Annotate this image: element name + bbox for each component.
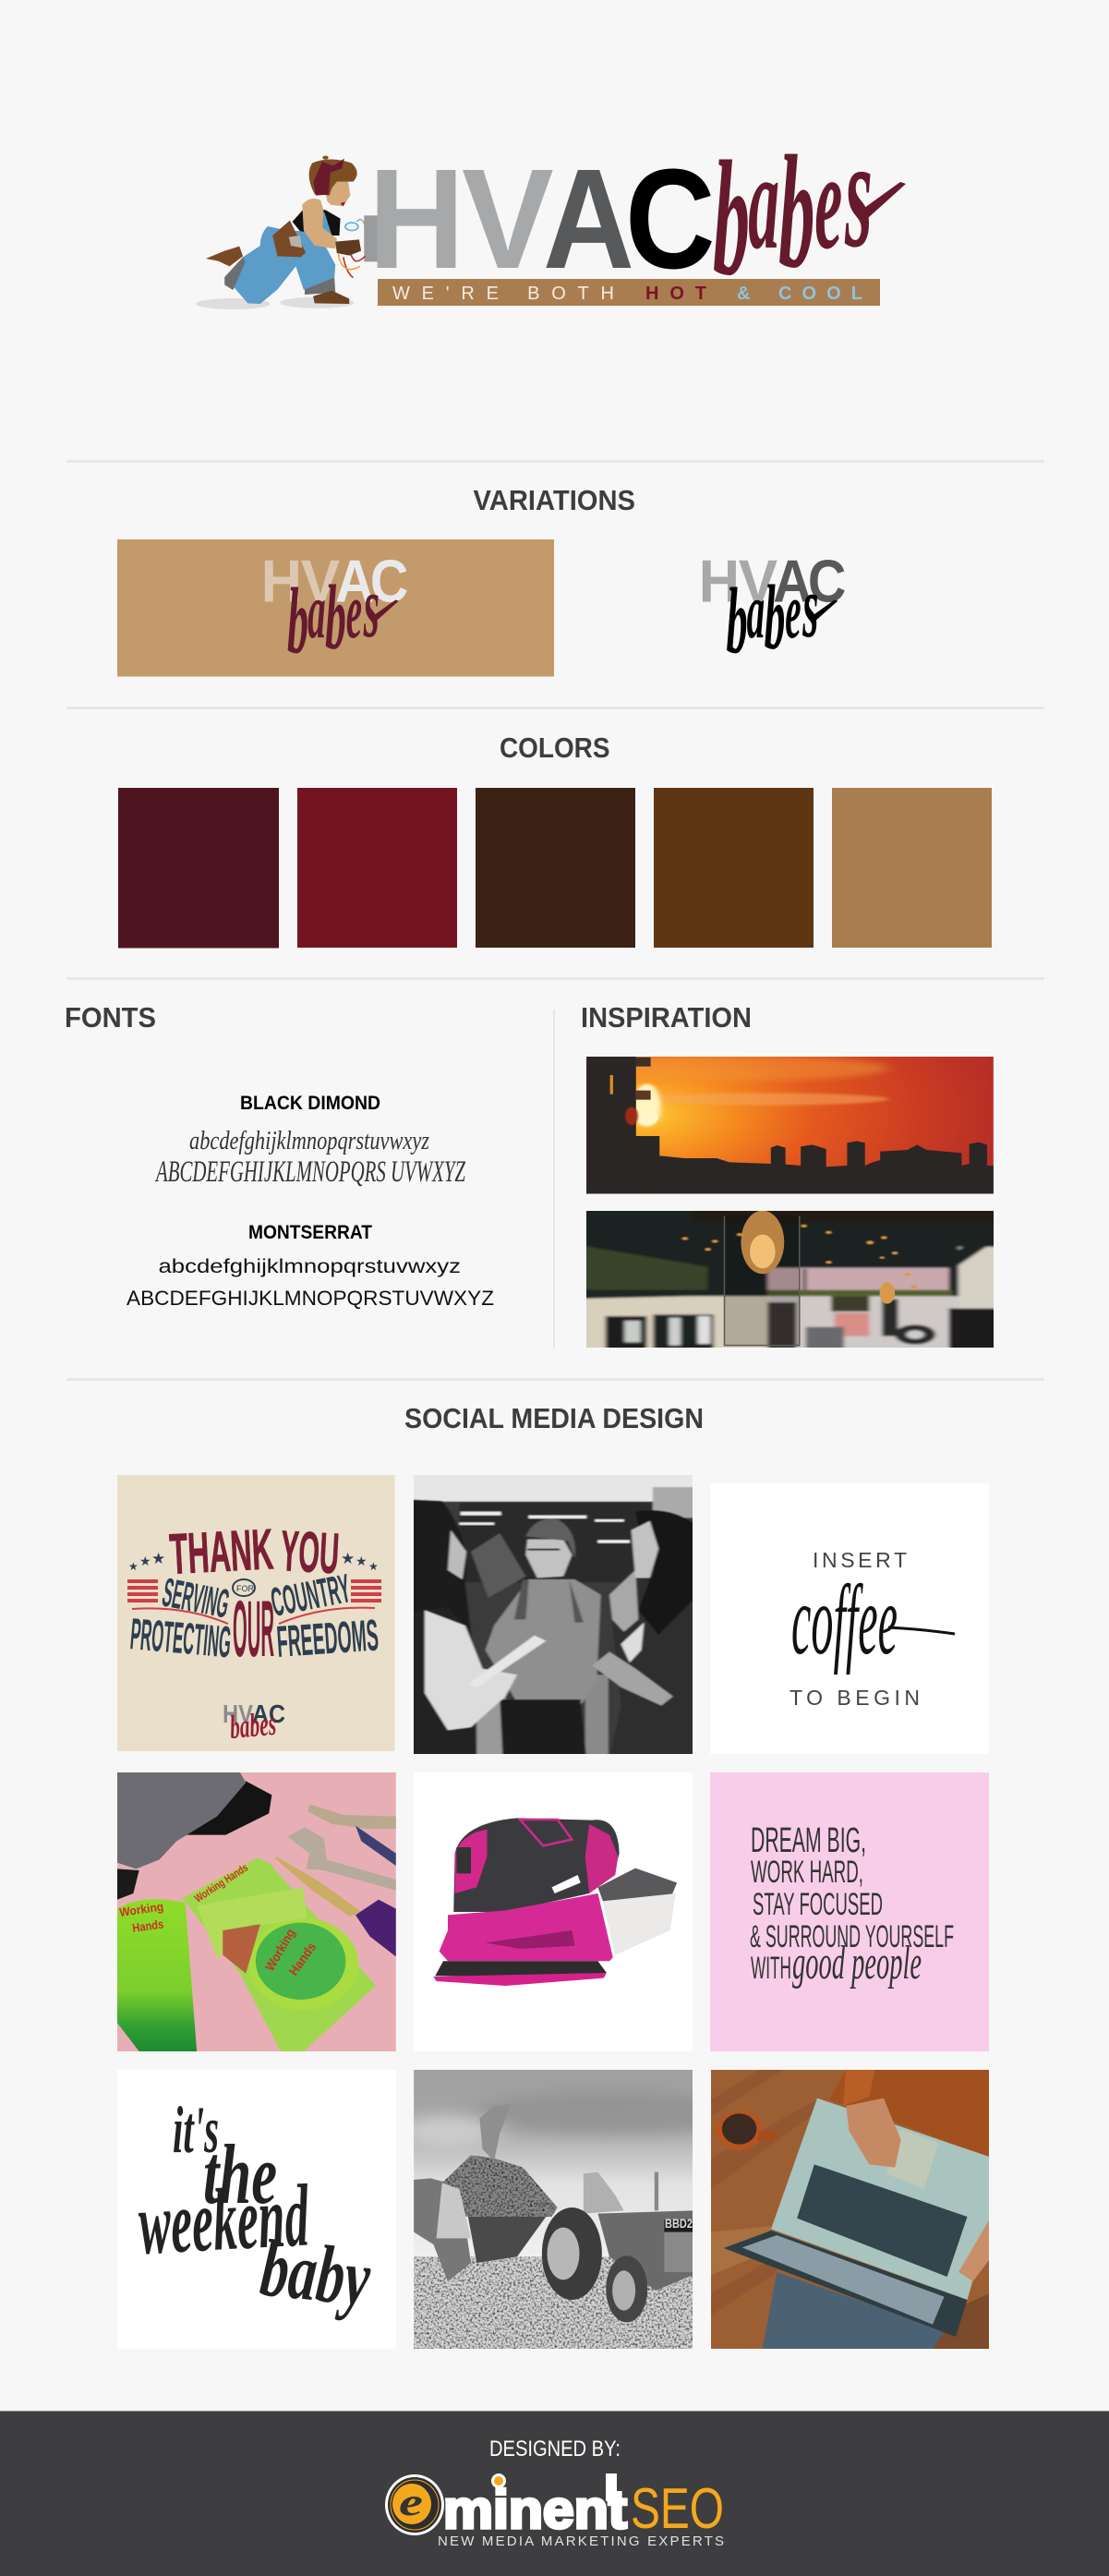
- logo script babes: s: [845, 106, 873, 280]
- coffee script word: coffee: [791, 1566, 898, 1675]
- variation: logo on plain background: [699, 548, 846, 673]
- variation: logo on tan panel: H: [261, 549, 302, 615]
- poster stars: ★: [356, 1554, 368, 1569]
- heading: colors: COLORS: [500, 732, 609, 764]
- main logo: HVAC babes with mechanic figure: [196, 106, 906, 309]
- variation: logo on plain background: e: [785, 568, 802, 655]
- logo gauge badge: [385, 2474, 444, 2535]
- product labels: Working: [118, 1899, 164, 1919]
- designed by label: DESIGNED BY:: [489, 2437, 621, 2461]
- poster lockup text: FOR: [236, 1584, 254, 1593]
- social tile: dream big hand lettering: [710, 1772, 989, 2051]
- logo wordmark HVAC: A: [543, 139, 634, 298]
- variation: logo on tan panel: b: [325, 566, 346, 668]
- variation: logo on tan panel: s: [363, 558, 380, 657]
- social tile: pink power sander: [414, 1772, 693, 2051]
- font sample: montserrat: [127, 1222, 494, 1310]
- variation: logo on plain background: H: [699, 549, 740, 615]
- product labels: Working Hands: [192, 1861, 250, 1905]
- heading: variations: VARIATIONS: [473, 484, 635, 516]
- social tile: dream big hand lettering: DREAM BIG,: [751, 1821, 866, 1860]
- logo tagline band: HOT: [645, 284, 706, 304]
- logo wordmark HVAC: C: [625, 139, 716, 298]
- eminent seo logo: NEW MEDIA MARKETING EXPERTS: [438, 2534, 724, 2549]
- inspiration photo: sunset skyline: [586, 1056, 994, 1194]
- heading: fonts: FONTS: [65, 1001, 156, 1034]
- social tile: dream big hand lettering: good people: [792, 1937, 922, 1989]
- logo script babes: a: [748, 125, 779, 279]
- social tile: it's the weekend baby lettering: weekend: [136, 2165, 312, 2273]
- footer band: [0, 2411, 1109, 2576]
- infographic canvas: FREEDOMS: [275, 1611, 380, 1667]
- variation: logo on plain background: b: [765, 566, 785, 668]
- product labels: Working: [262, 1926, 298, 1973]
- logo tagline band: [378, 279, 880, 306]
- font sample: black dimond: [155, 1093, 465, 1189]
- logo script babes: b: [778, 123, 814, 302]
- poster lockup text: SERVING: [159, 1570, 233, 1627]
- variation: logo on plain background: C: [808, 548, 846, 614]
- variation: logo on plain background: V: [739, 548, 778, 615]
- social tile: work gloves, tools and hand cream: [117, 1772, 396, 2051]
- eminent seo logo: [385, 2473, 724, 2549]
- social tile: dream big hand lettering: STAY FOCUSED: [753, 1887, 883, 1922]
- poster stars: ★: [128, 1560, 139, 1573]
- variation: logo on plain background: a: [747, 568, 765, 655]
- social tile: it's the weekend baby lettering: it's: [173, 2093, 219, 2167]
- heading: social media design: SOCIAL MEDIA DESIGN: [404, 1402, 704, 1434]
- logo wordmark HVAC: H: [368, 139, 464, 298]
- variation: logo on tan panel: b: [287, 570, 308, 673]
- variation: logo on tan panel: V: [301, 548, 340, 615]
- variation: logo on plain background: s: [802, 558, 818, 657]
- font sample: montserrat: MONTSERRAT: [248, 1222, 372, 1243]
- eminent seo logo: SEO: [631, 2477, 724, 2541]
- logo tagline band: WE'RE BOTH: [392, 284, 614, 304]
- variation: logo on tan panel: e: [346, 568, 362, 655]
- social tile: dream big hand lettering: WORK HARD,: [751, 1855, 863, 1890]
- social tile: it's the weekend baby lettering: the: [203, 2127, 277, 2221]
- poster mini logo: [223, 1699, 285, 1746]
- logo gauge badge: e: [399, 2482, 423, 2524]
- poster stars: [128, 1550, 379, 1573]
- social tile: thank you poster: YOU: [279, 1519, 341, 1586]
- inspiration photo: edison bulb interior: [580, 1208, 1000, 1351]
- social tile: insert coffee to begin: [710, 1483, 989, 1754]
- logo tagline band: COOL: [778, 284, 862, 304]
- product labels: Hands: [131, 1917, 164, 1935]
- font sample: montserrat: abcdefghijklmnopqrstuvwxyz: [159, 1256, 461, 1277]
- poster headline thank you: THANK: [168, 1518, 275, 1587]
- variation: logo on plain background: A: [773, 549, 812, 615]
- eminent seo logo: minent: [443, 2480, 627, 2540]
- poster stars: ★: [139, 1554, 151, 1569]
- logo wordmark HVAC: [368, 139, 716, 298]
- poster stars: ★: [151, 1550, 165, 1568]
- heading: inspiration: INSPIRATION: [581, 1001, 752, 1034]
- font sample: black dimond: BLACK DIMOND: [240, 1093, 380, 1114]
- logo script babes: b: [713, 127, 750, 309]
- product labels: Hands: [285, 1940, 319, 1978]
- logo tagline band: &: [737, 284, 750, 304]
- poster stars: ★: [368, 1560, 379, 1573]
- logo script babes: e: [814, 125, 842, 279]
- logo script babes: [713, 106, 906, 309]
- social tile: thank you poster: OUR: [233, 1585, 274, 1674]
- variation: logo on tan panel: [117, 539, 554, 676]
- social tile: thank you poster: [117, 1475, 395, 1751]
- product labels: [118, 1861, 319, 1978]
- social tile: vintage tractor photo: [414, 2070, 693, 2349]
- social tile: it's the weekend baby lettering: [117, 2070, 396, 2349]
- poster mini logo: HV: [223, 1699, 253, 1728]
- poster mini logo: AC: [252, 1699, 285, 1728]
- poster stars: ★: [341, 1550, 355, 1568]
- social tile: insert coffee to begin: INSERT: [813, 1548, 907, 1572]
- coffee script word: [791, 1566, 955, 1675]
- poster mini logo: babes: [228, 1705, 278, 1746]
- social tile: insert coffee to begin: TO BEGIN: [790, 1686, 920, 1710]
- logo mascot: mechanic pushing the letters: [196, 156, 378, 309]
- variation: logo on tan panel: C: [370, 548, 408, 614]
- font sample: montserrat: ABCDEFGHIJKLMNOPQRSTUVWXYZ: [127, 1287, 494, 1310]
- social tile: vintage tractor photo: BBD2: [665, 2216, 693, 2231]
- social tile: black and white photo of women talking: [408, 1472, 698, 1757]
- variation: logo on tan panel: a: [307, 568, 326, 655]
- poster lockup text: COUNTRY: [268, 1566, 354, 1626]
- font sample: black dimond: abcdefghijklmnopqrstuvwxyz: [189, 1127, 429, 1155]
- social tile: dream big hand lettering: WITH: [751, 1951, 791, 1986]
- font sample: black dimond: ABCDEFGHIJKLMNOPQRS UVWXYZ: [155, 1155, 465, 1189]
- social tile: it's the weekend baby lettering: baby: [257, 2223, 375, 2324]
- poster lockup text: PROTECTING: [128, 1610, 233, 1667]
- variation: logo on plain background: b: [727, 570, 748, 673]
- social tile: laptop on lap over wood floor: [711, 2070, 989, 2349]
- color swatches: [118, 788, 992, 948]
- logo wordmark HVAC: V: [462, 140, 554, 298]
- poster lockup text: [128, 1566, 380, 1667]
- variation: logo on tan panel: A: [335, 549, 374, 615]
